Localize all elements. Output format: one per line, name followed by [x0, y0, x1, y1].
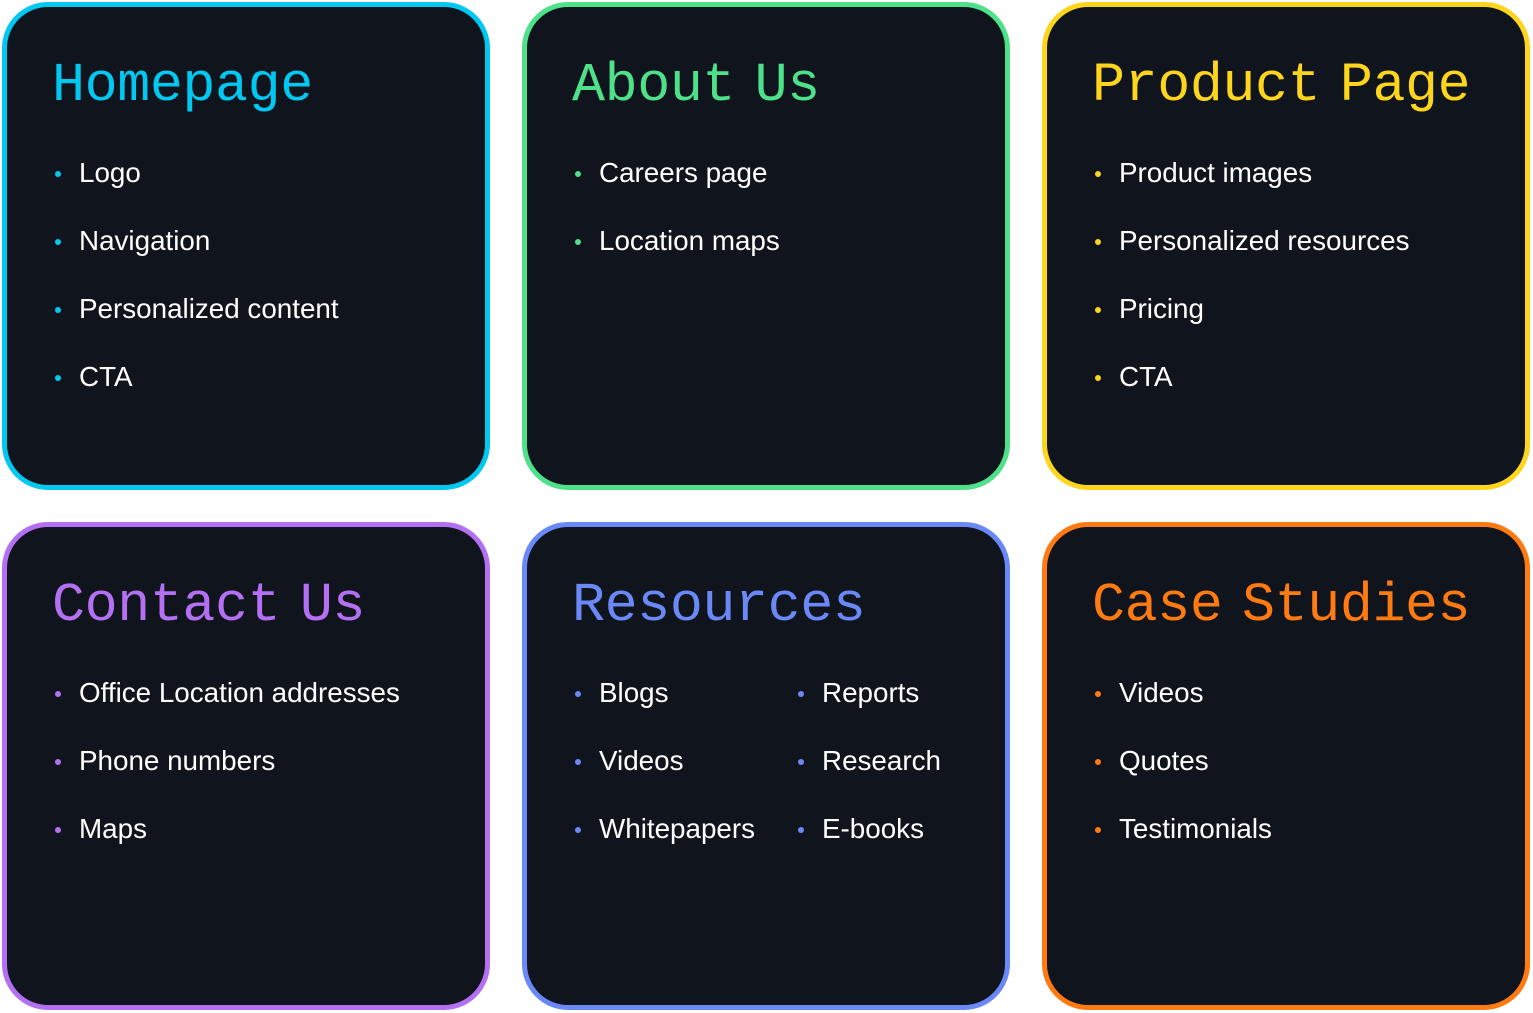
- item: Quotes: Quotes: [1119, 745, 1209, 776]
- item: Personalized resources: Personalized resources: [1119, 225, 1409, 256]
- item: Videos: Videos: [1119, 677, 1204, 708]
- heading: Case Studies: Case Studies: [1092, 574, 1470, 637]
- item: CTA: CTA: [1119, 361, 1173, 392]
- heading: Homepage: Homepage: [52, 54, 313, 117]
- item: Phone numbers: Phone numbers: [79, 745, 275, 776]
- item: Blogs: Blogs: [599, 677, 669, 708]
- item: Personalized content: Personalized content: [79, 293, 339, 324]
- item: Maps: Maps: [79, 813, 147, 844]
- item: CTA: CTA: [79, 361, 133, 392]
- item: Testimonials: Testimonials: [1119, 813, 1272, 844]
- item: Product images: Product images: [1119, 157, 1312, 188]
- heading: About Us: About Us: [572, 54, 820, 117]
- item: Logo: Logo: [79, 157, 141, 188]
- panel: Homepage: [2, 2, 490, 490]
- heading: Resources: Resources: [572, 574, 865, 637]
- item: CTA: [1095, 361, 1173, 392]
- item: Videos: Videos: [599, 745, 684, 776]
- heading: Contact Us: Contact Us: [52, 574, 365, 637]
- panel: Contact Us: [2, 522, 490, 1010]
- panel: Case Studies: [1042, 522, 1530, 1010]
- panel: Product Page: [1042, 2, 1530, 490]
- item: Navigation: Navigation: [79, 225, 210, 256]
- item: Research: Research: [822, 745, 941, 776]
- item: Reports: Reports: [822, 677, 919, 708]
- item: Location maps: Location maps: [599, 225, 780, 256]
- heading: Product Page: Product Page: [1092, 54, 1470, 117]
- item: CTA: [55, 361, 133, 392]
- item: Whitepapers: Whitepapers: [599, 813, 755, 844]
- item: Pricing: Pricing: [1119, 293, 1204, 324]
- panel: About Us: [522, 2, 1010, 490]
- panel: Resources: [522, 522, 1010, 1010]
- item: Careers page: Careers page: [599, 157, 767, 188]
- item: Office Location addresses: Office Location addresses: [79, 677, 400, 708]
- item: E-books: E-books: [822, 813, 924, 844]
